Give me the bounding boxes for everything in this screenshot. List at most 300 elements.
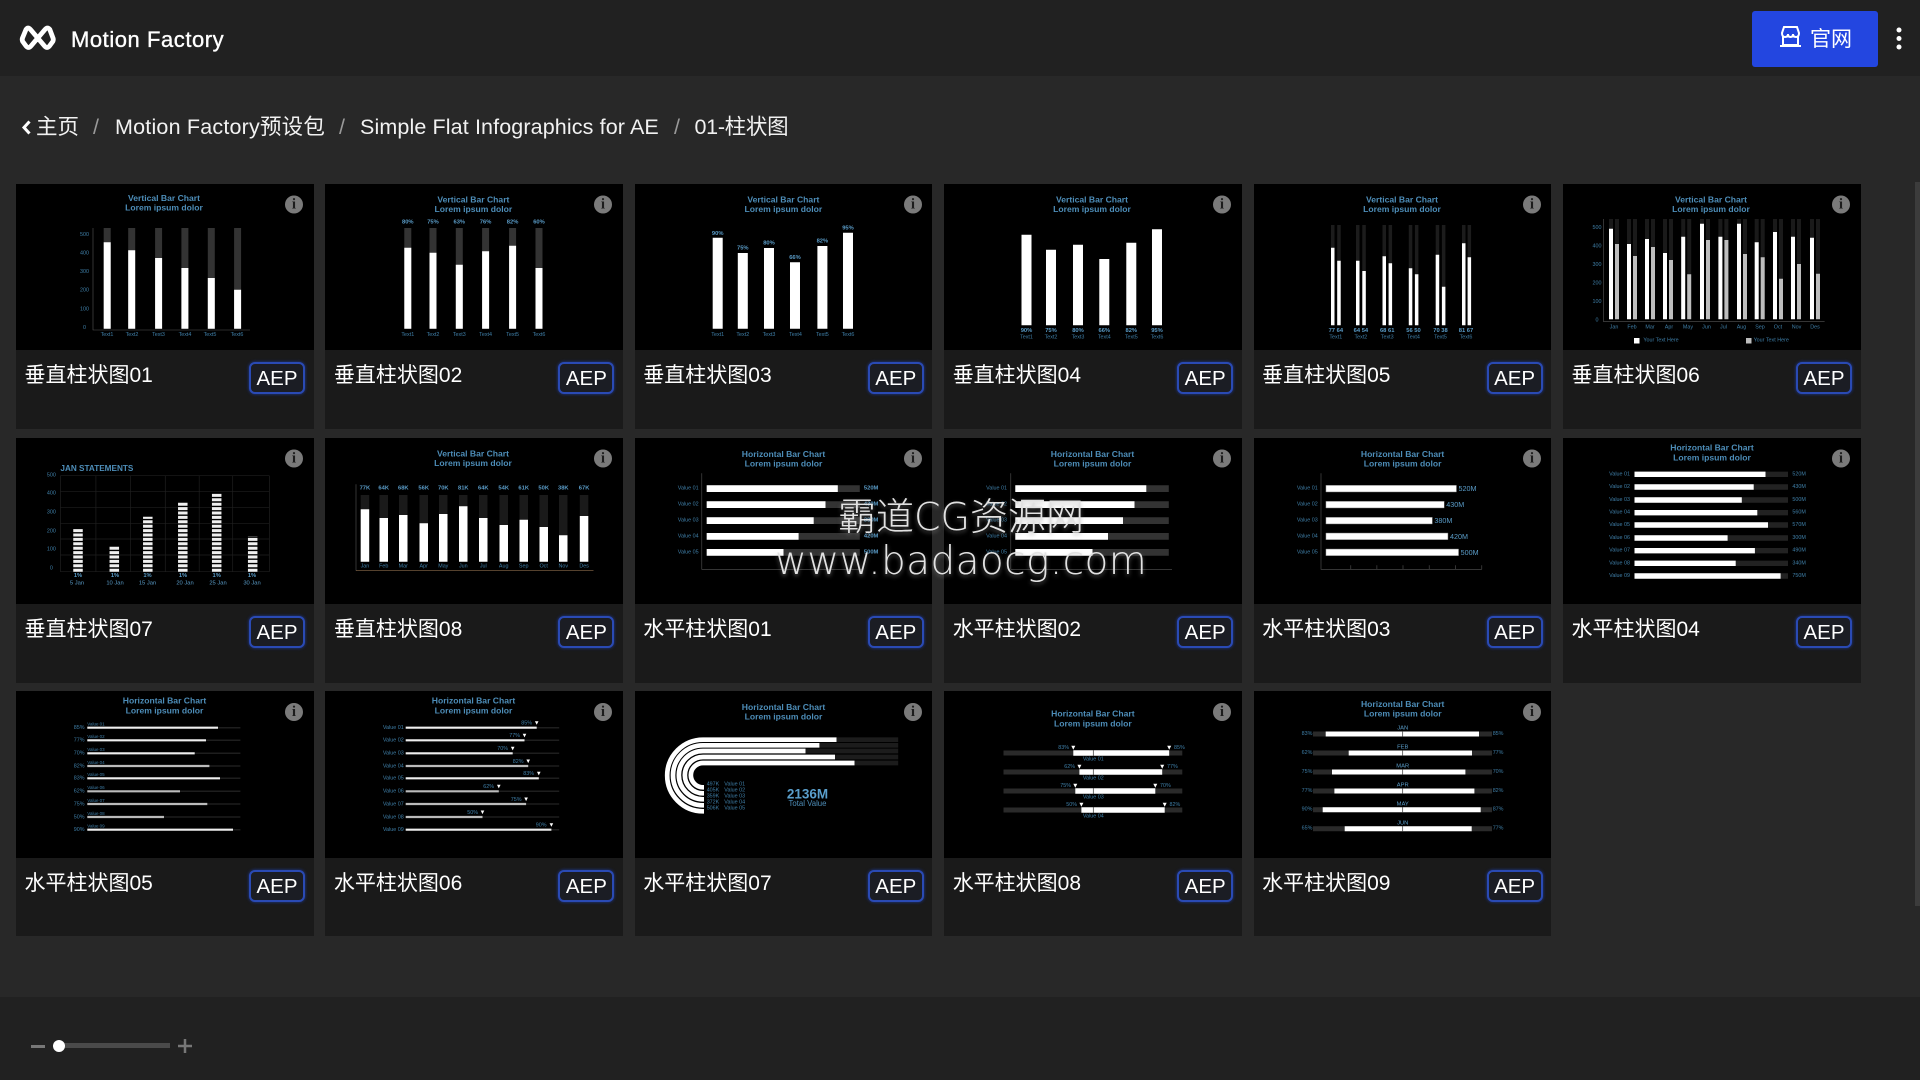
month and value labels: 87% [1492, 807, 1503, 813]
chart heading [1051, 449, 1135, 469]
separator: / [339, 115, 345, 139]
card title: 水平柱状图09 [1262, 872, 1390, 895]
info icon: i [1530, 197, 1534, 213]
month and value labels: MAR [1396, 764, 1409, 770]
header bar [0, 0, 1920, 76]
axis labels: 100 [47, 547, 56, 553]
card title: 水平柱状图08 [953, 872, 1081, 895]
info icon: i [292, 704, 296, 720]
chart heading: Horizontal Bar Chart [123, 696, 206, 706]
chart heading: Lorem ipsum dolor [126, 705, 204, 715]
value and axis labels: Text3 [1072, 335, 1085, 341]
axis labels: 0 [50, 565, 53, 571]
axis labels: Jun [1702, 324, 1711, 330]
value and axis labels: Text6 [841, 332, 854, 338]
axis labels: 1% [143, 573, 152, 579]
row labels: 77% [74, 738, 85, 744]
row labels: 560M [1792, 510, 1806, 516]
total value: 2136M [787, 786, 828, 801]
AEP badge: AEP [1494, 621, 1535, 644]
info icon: i [911, 451, 915, 467]
info icon: i [292, 451, 296, 467]
AEP badge [1177, 870, 1233, 902]
value and axis labels: Text2 [736, 332, 749, 338]
row labels: 340M [1792, 560, 1806, 566]
chart heading [1053, 194, 1132, 214]
value and month labels: Jun [459, 564, 468, 570]
range labels: 50% [1066, 802, 1077, 808]
row labels: Value 09 [1609, 573, 1630, 579]
chart heading [1363, 194, 1441, 214]
AEP badge: AEP [566, 621, 607, 644]
row labels [74, 722, 105, 833]
axis labels: 15 Jan [139, 581, 156, 587]
chart thumbnail [944, 438, 1242, 604]
info icon: i [1220, 704, 1224, 720]
chart heading [742, 449, 825, 469]
AEP badge: AEP [875, 367, 916, 390]
bars [93, 228, 250, 330]
row labels: Value 06 [87, 785, 105, 790]
card: 水平柱状图04 [1563, 438, 1861, 683]
info icon: i [1530, 704, 1534, 720]
legend [1634, 338, 1789, 344]
value and month labels: 77K [360, 486, 371, 492]
AEP badge: AEP [875, 621, 916, 644]
value and axis labels: Text5 [816, 332, 829, 338]
info icon: i [601, 704, 605, 720]
chart heading [1361, 699, 1444, 719]
value and month labels [360, 486, 591, 570]
value and month labels: Nov [559, 564, 569, 570]
row labels: Value 03 [1609, 497, 1630, 503]
axis labels [1593, 225, 1820, 330]
chart thumbnail [1254, 438, 1551, 604]
curved bar labels: 405K [706, 788, 719, 794]
row labels: Value 02 [1609, 484, 1630, 490]
value and axis labels: Text4 [1098, 335, 1111, 341]
month and value labels: 85% [1492, 731, 1503, 737]
row labels: Value 02 [87, 734, 105, 739]
AEP badge: AEP [1494, 875, 1535, 898]
chart thumbnail [635, 691, 932, 858]
AEP badge [558, 616, 614, 648]
range labels: 62% [1064, 764, 1075, 770]
axis labels: 500 [80, 232, 89, 238]
value and month labels: Jul [480, 564, 487, 570]
card title: 水平柱状图07 [643, 872, 772, 895]
info icon [285, 450, 303, 468]
row labels: 62% [484, 784, 495, 790]
row labels: 90% [536, 822, 547, 828]
axis labels: Text3 [152, 332, 165, 338]
month and value labels: 90% [1301, 807, 1312, 813]
zoom slider [31, 1039, 192, 1053]
card: 垂直柱状图03 [635, 184, 932, 429]
month and value labels: FEB [1397, 745, 1408, 751]
axis labels: 100 [1593, 299, 1601, 305]
value and axis labels: Text3 [453, 332, 466, 338]
value and axis labels: 70 38 [1433, 328, 1448, 334]
month and value labels: 77% [1492, 826, 1503, 832]
value and axis labels: Text1 [1329, 335, 1342, 341]
card title: 垂直柱状图03 [643, 364, 772, 387]
chart heading: Horizontal Bar Chart [432, 696, 516, 706]
row labels: 62% [74, 789, 85, 795]
row labels: Value 05 [986, 549, 1007, 555]
AEP badge: AEP [566, 367, 607, 390]
chart thumbnail [1254, 184, 1551, 350]
bars [712, 233, 853, 329]
row labels: 500M [864, 549, 878, 555]
plus icon [178, 1039, 192, 1053]
card: 水平柱状图08 [944, 691, 1242, 936]
chart heading: Lorem ipsum dolor [1054, 719, 1133, 729]
value and axis labels: 82% [507, 220, 519, 226]
chart heading: Vertical Bar Chart [128, 193, 200, 203]
value and month labels: 64K [478, 486, 490, 492]
chart heading: Horizontal Bar Chart [742, 702, 825, 712]
range labels: Value 03 [1083, 794, 1104, 800]
horizontal bars [1321, 473, 1481, 569]
curved bar labels: Value 03 [724, 794, 745, 800]
range labels [1058, 745, 1185, 819]
bars [405, 228, 543, 329]
row labels: 85% [74, 725, 85, 731]
axis labels: Jan [1610, 324, 1618, 330]
icon: Motion Factory logo [20, 26, 56, 50]
month and value labels: APR [1396, 782, 1408, 788]
marker triangles [481, 721, 554, 827]
value and axis labels: 82% [1126, 328, 1137, 334]
card: 水平柱状图02 [944, 438, 1242, 683]
axis labels: 200 [80, 288, 89, 294]
value and axis labels: Text3 [1380, 335, 1393, 341]
info icon [1213, 450, 1231, 468]
AEP badge [1177, 362, 1233, 394]
chart heading: Lorem ipsum dolor [435, 204, 513, 214]
AEP badge: AEP [1185, 367, 1226, 390]
card title: 水平柱状图06 [334, 872, 462, 895]
month and value labels: 65% [1301, 826, 1312, 832]
info icon [1213, 703, 1231, 721]
month and value labels: 75% [1301, 769, 1312, 775]
crumb: presets: Motion Factory预设包 [115, 115, 325, 139]
axis labels: 20 Jan [176, 581, 194, 587]
row labels: 500M [1460, 548, 1478, 557]
value and month labels: Mar [399, 564, 409, 570]
axis labels: 500 [1593, 225, 1601, 231]
row labels: 380M [1434, 516, 1452, 525]
chart thumbnail [16, 184, 314, 350]
value and axis labels: 60% [534, 220, 545, 226]
value and month labels: Oct [540, 564, 549, 570]
info icon: i [911, 197, 915, 213]
info icon [594, 703, 612, 721]
chart heading: Vertical Bar Chart [747, 194, 819, 204]
icon: more menu [1896, 28, 1902, 50]
value and month labels: 38K [558, 486, 570, 492]
striped bars [78, 493, 253, 572]
row labels [1296, 484, 1478, 557]
row labels: Value 07 [87, 798, 105, 803]
card: 垂直柱状图01 [16, 184, 314, 429]
row labels: 430M [864, 502, 878, 508]
bars [1022, 229, 1162, 325]
info icon [1213, 196, 1231, 214]
info icon: i [1839, 451, 1843, 467]
axis labels: Oct [1774, 324, 1783, 330]
row labels: Value 04 [678, 533, 698, 539]
info icon: i [911, 704, 915, 720]
range labels: 75% [1060, 783, 1071, 789]
row labels: Value 02 [383, 738, 404, 744]
card title: 垂直柱状图04 [953, 364, 1081, 387]
AEP badge [1487, 362, 1543, 394]
axis labels: 5 Jan [70, 581, 84, 587]
row labels: 520M [1458, 484, 1476, 493]
value and axis labels: Text1 [711, 332, 724, 338]
row labels: Value 05 [678, 549, 698, 555]
value and axis labels: Text6 [1151, 335, 1164, 341]
row labels: 75% [511, 797, 522, 803]
axis labels: 200 [47, 528, 56, 534]
curved bar labels: 359K [706, 794, 719, 800]
axis labels: Nov [1792, 324, 1802, 330]
curved bar labels: 372K [706, 800, 719, 806]
month and value labels: 62% [1301, 750, 1312, 756]
brand name: Motion Factory [71, 27, 224, 52]
value and axis labels: 64 54 [1353, 328, 1369, 334]
card title: 垂直柱状图08 [334, 618, 462, 641]
card title: 水平柱状图03 [1262, 618, 1390, 641]
value and axis labels: Text1 [402, 332, 415, 338]
row labels: Value 06 [1609, 535, 1630, 541]
row labels: Value 03 [87, 747, 105, 752]
chart heading: Vertical Bar Chart [1056, 194, 1128, 204]
footer bar [0, 997, 1920, 1080]
row labels: Value 03 [1296, 518, 1317, 524]
row labels: 82% [74, 763, 85, 769]
value and axis labels: Text2 [1354, 335, 1367, 341]
value and axis labels: Text4 [1407, 335, 1420, 341]
row labels: Value 01 [87, 722, 105, 727]
chart heading [123, 696, 206, 715]
row labels: Value 03 [678, 518, 698, 524]
chart heading: Vertical Bar Chart [437, 448, 510, 458]
value and axis labels [402, 220, 546, 338]
chart thumbnail [1563, 438, 1861, 604]
card title: 垂直柱状图02 [334, 364, 462, 387]
value and month labels: 54K [499, 486, 510, 492]
row labels: 380M [864, 518, 878, 524]
value and axis labels: Text5 [1125, 335, 1138, 341]
row labels [678, 486, 878, 555]
chart thumbnail [944, 184, 1242, 350]
crumb: home: 主页 [36, 115, 79, 139]
chart heading: Vertical Bar Chart [438, 194, 510, 204]
axis labels: 500 [47, 473, 56, 479]
row labels: 83% [74, 776, 85, 782]
value and axis labels: 82% [816, 239, 828, 245]
axis labels: 1% [248, 573, 256, 579]
curved bars [667, 740, 898, 811]
chart heading [1670, 443, 1754, 462]
row labels: Value 01 [383, 725, 404, 731]
row labels: Value 08 [1609, 560, 1630, 566]
axis labels: 1% [111, 573, 119, 579]
icon: store [1780, 26, 1801, 47]
range labels: 82% [1170, 802, 1181, 808]
value and axis labels: Text5 [1434, 335, 1447, 341]
axis labels: Jul [1720, 324, 1727, 330]
curved bar labels: Value 02 [724, 788, 745, 794]
value and axis labels: 90% [1021, 328, 1032, 334]
chart heading: Horizontal Bar Chart [1361, 699, 1444, 709]
crumb: current: 01-柱状图 [694, 115, 788, 139]
row labels: Value 01 [1609, 471, 1630, 477]
value and month labels: 61K [519, 486, 530, 492]
axis labels: Apr [1665, 324, 1673, 330]
chart thumbnail [635, 184, 932, 350]
AEP badge: AEP [1803, 621, 1845, 644]
row labels: Value 04 [1609, 510, 1630, 516]
row labels: Value 03 [383, 751, 404, 757]
AEP badge [868, 362, 924, 394]
axis labels: 10 Jan [106, 581, 124, 587]
row labels: Value 01 [986, 486, 1007, 492]
row labels: Value 05 [383, 776, 404, 782]
chart heading: Horizontal Bar Chart [742, 449, 825, 459]
AEP badge: AEP [1185, 621, 1226, 644]
chart heading: Lorem ipsum dolor [1363, 459, 1442, 469]
slider track [59, 1043, 170, 1048]
chart thumbnail [944, 691, 1242, 858]
axis labels: 300 [80, 269, 89, 275]
value and month labels: 56K [419, 486, 430, 492]
month and value labels: JAN [1397, 726, 1408, 732]
row labels: 420M [1450, 532, 1468, 541]
axis labels: 30 Jan [243, 581, 261, 587]
chart heading: JAN STATEMENTS [60, 464, 134, 473]
thin horizontal bars [87, 728, 240, 830]
AEP badge: AEP [566, 875, 607, 898]
value and month labels: May [439, 564, 449, 570]
value and axis labels: 80% [402, 220, 414, 226]
row labels: 570M [1792, 522, 1806, 528]
value and axis labels: 76% [480, 220, 492, 226]
row labels: Value 01 [1296, 486, 1317, 492]
card: 水平柱状图06 [325, 691, 623, 936]
row labels: Value 01 [678, 486, 698, 492]
card: 垂直柱状图06 [1563, 184, 1861, 429]
range labels: 70% [1160, 783, 1171, 789]
info icon: i [292, 197, 296, 213]
month and value labels: JUN [1397, 820, 1408, 826]
axis labels: Text5 [204, 332, 216, 338]
value and month labels: Aug [499, 564, 509, 570]
value and axis labels [1328, 328, 1473, 341]
axis labels [47, 473, 261, 587]
row labels: Value 09 [87, 823, 105, 828]
slider knob [53, 1040, 65, 1052]
card: 水平柱状图07 [635, 691, 932, 936]
axis labels: 1% [179, 573, 187, 579]
info icon [285, 196, 303, 214]
value and axis labels: Text1 [1020, 335, 1033, 341]
chart heading: Lorem ipsum dolor [1053, 204, 1132, 214]
value and axis labels: Text3 [762, 332, 775, 338]
legend: Your Text Here [1643, 338, 1679, 344]
value and month labels: 70K [438, 486, 450, 492]
value and axis labels: 77 64 [1328, 328, 1343, 334]
value and axis labels [1020, 328, 1164, 341]
row labels: Value 04 [986, 533, 1007, 539]
card: 水平柱状图05 [16, 691, 314, 936]
card title: 水平柱状图02 [953, 618, 1081, 641]
row labels: Value 08 [87, 811, 105, 816]
row labels: 520M [1792, 471, 1806, 477]
AEP badge: AEP [256, 621, 298, 644]
axis labels: 1% [74, 573, 82, 579]
value and axis labels: Text5 [507, 332, 519, 338]
crumb: pack: Simple Flat Infographics for AE [360, 115, 659, 139]
info icon: i [601, 197, 605, 213]
chart heading: Horizontal Bar Chart [1051, 709, 1135, 719]
axis labels: 1% [213, 573, 221, 579]
AEP badge: AEP [1494, 367, 1535, 390]
AEP badge [1796, 616, 1852, 648]
info icon: i [1839, 197, 1843, 213]
AEP badge [249, 870, 305, 902]
card title: 垂直柱状图07 [24, 618, 153, 641]
AEP badge [1177, 616, 1233, 648]
grid [60, 476, 269, 572]
value and axis labels: 90% [712, 231, 723, 237]
info icon [1523, 450, 1541, 468]
total value: Total Value [788, 799, 826, 808]
card title: 垂直柱状图05 [1262, 364, 1390, 387]
month and value labels: 77% [1301, 788, 1312, 794]
curved bar labels: Value 05 [724, 806, 745, 812]
info icon [1523, 703, 1541, 721]
chart heading: Lorem ipsum dolor [1363, 709, 1442, 719]
separator: / [93, 115, 99, 139]
range labels: Value 01 [1083, 756, 1104, 762]
value and axis labels: 63% [454, 220, 465, 226]
row labels: 490M [1792, 548, 1806, 554]
minus icon [31, 1045, 45, 1048]
chart thumbnail [1254, 691, 1551, 858]
thin horizontal bars [406, 728, 560, 830]
chart heading [1672, 194, 1750, 214]
axis labels: Aug [1737, 324, 1746, 330]
value and axis labels: 75% [737, 246, 748, 252]
axis labels [80, 232, 243, 338]
AEP badge [558, 362, 614, 394]
watermark url: www.badaocg.com [775, 539, 1147, 584]
axis labels: Text2 [126, 332, 138, 338]
value and month labels: 50K [539, 486, 550, 492]
info icon: i [601, 451, 605, 467]
axis labels: May [1683, 324, 1693, 330]
row labels: Value 02 [1296, 502, 1317, 508]
value and month labels: 81K [458, 486, 470, 492]
row labels: Value 04 [87, 760, 105, 765]
paired bars [1331, 225, 1471, 325]
legend: Your Text Here [1754, 338, 1789, 344]
row labels: 750M [1792, 573, 1806, 579]
